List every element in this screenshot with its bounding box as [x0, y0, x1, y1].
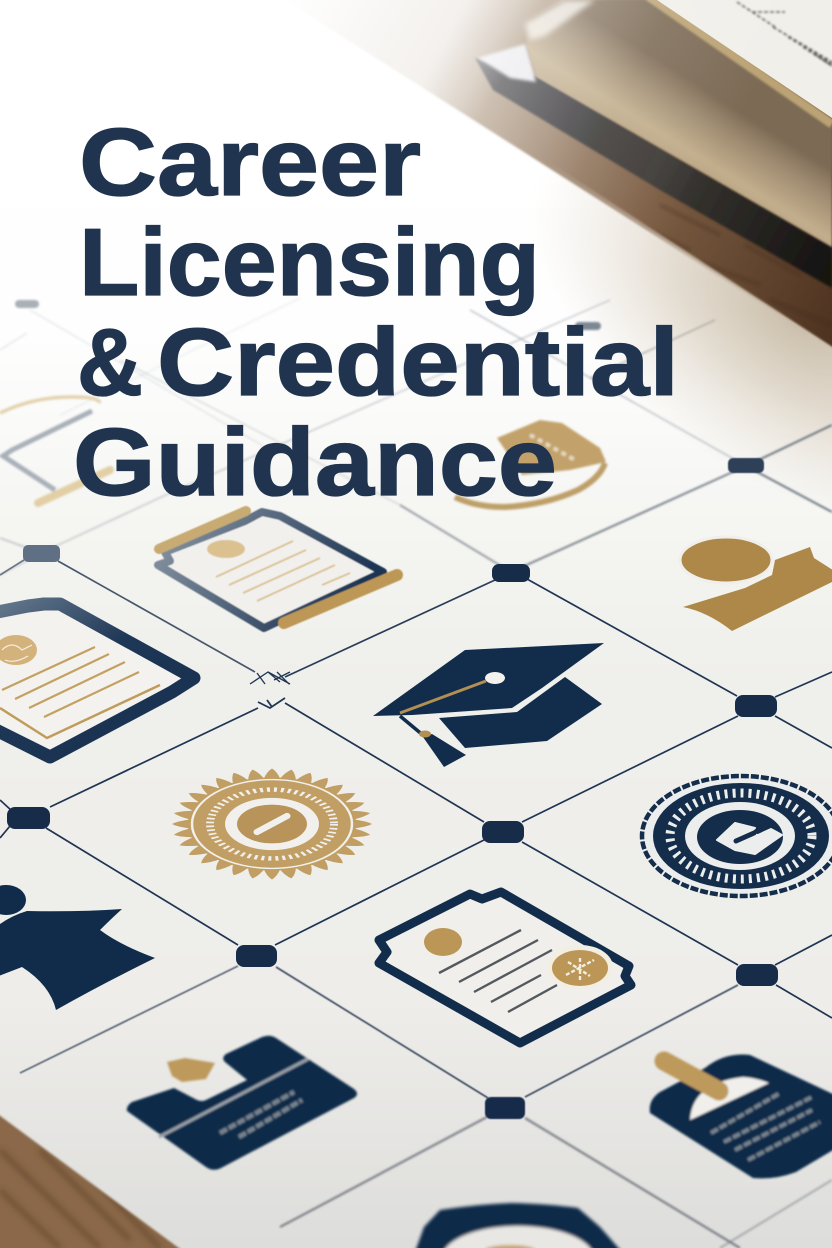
- icon: navy person: [0, 885, 155, 1010]
- grid: upper faint lines: [0, 298, 832, 575]
- page block: [527, 0, 832, 247]
- cap board: [373, 643, 604, 716]
- gold page edge: [648, 0, 832, 124]
- icon: gold badge behind title: [455, 420, 606, 507]
- cap base: [439, 677, 602, 748]
- icon: faint certificate, top left: [0, 397, 110, 503]
- icon: certificate, left edge: [0, 604, 194, 757]
- icon: navy ID card: [127, 1036, 357, 1170]
- soft white haze over the table and book: [270, 0, 832, 360]
- icon: navy round seal: [642, 776, 832, 896]
- title: &: [77, 309, 143, 416]
- icon: gold seal: [157, 760, 387, 888]
- title: Guidance: [73, 409, 557, 516]
- seal emblem: [717, 823, 782, 854]
- title: Credential: [157, 309, 679, 416]
- icon: navy tag with gold pill: [650, 1055, 832, 1178]
- dark page shading: [600, 0, 832, 172]
- tassel: [400, 716, 424, 736]
- white sliver under pages: [478, 44, 536, 82]
- grid: lower blurred lines: [20, 966, 738, 1098]
- gold cord: [400, 681, 486, 713]
- grid nodes: [7, 300, 778, 1119]
- title: Career: [79, 109, 421, 216]
- page text: [737, 2, 832, 66]
- grid breaks: crossed marks: [250, 672, 290, 708]
- seal petals: [157, 760, 387, 888]
- icon: navy seal cropped at bottom: [415, 1203, 622, 1248]
- grid: main lines: [0, 560, 832, 1018]
- book cover: [475, 58, 832, 288]
- title: Licensing: [79, 209, 540, 316]
- open book stack: [475, 0, 832, 288]
- page highlight: [525, 0, 595, 40]
- icon: graduation cap: [373, 643, 604, 767]
- icon: certificate with gold seal: [379, 892, 631, 1043]
- button: [485, 672, 505, 684]
- title: [73, 109, 679, 516]
- open page: [657, 0, 832, 118]
- icon: certificate with gold bars: [158, 511, 397, 628]
- icon: gold bust: [680, 537, 832, 631]
